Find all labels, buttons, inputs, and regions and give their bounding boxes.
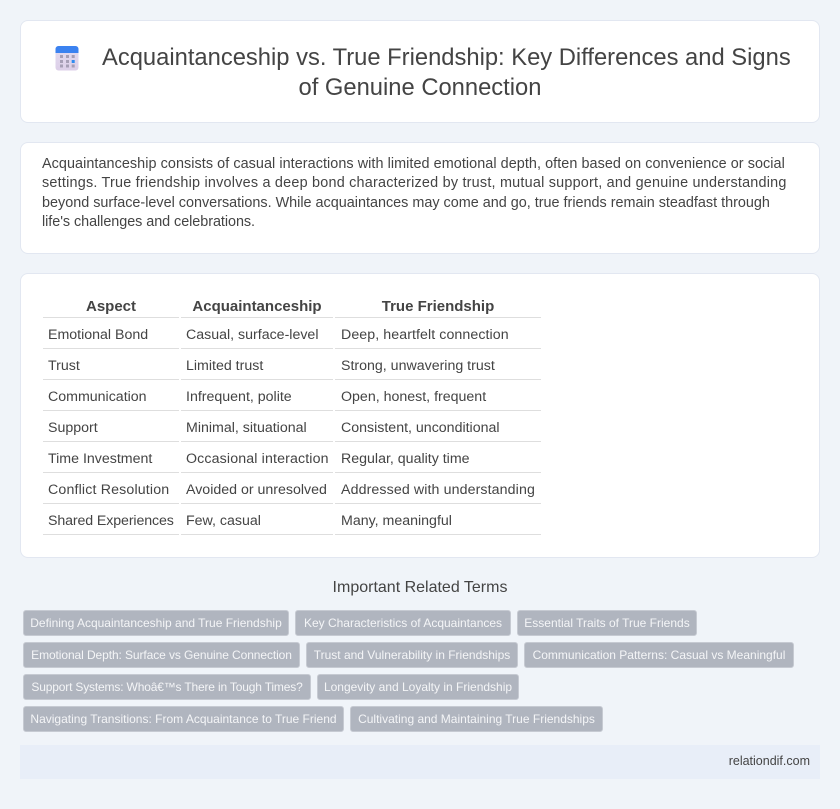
row: emotional bond: Casual, surface-level xyxy=(186,327,318,343)
chip xyxy=(524,642,794,668)
row: conflict resolution: Avoided or unresolved xyxy=(186,482,327,498)
chip: Essential Traits of True Friends xyxy=(524,616,690,630)
footer bar xyxy=(20,745,820,779)
chip: Emotional Depth: Surface vs Genuine Connection xyxy=(31,648,292,662)
row: communication: Communication xyxy=(48,389,147,405)
chip xyxy=(350,706,603,732)
chip xyxy=(517,610,697,636)
row: communication: Infrequent, polite xyxy=(186,389,292,405)
panel: intro paragraph xyxy=(20,142,820,254)
row: support: Consistent, unconditional xyxy=(341,420,500,436)
row: shared experiences: Many, meaningful xyxy=(341,513,452,529)
row: shared experiences: Few, casual xyxy=(186,513,261,529)
chip: Trust and Vulnerability in Friendships xyxy=(314,648,510,662)
chip xyxy=(295,610,511,636)
row: time investment: Regular, quality time xyxy=(341,451,470,467)
table header: true friendship: True Friendship xyxy=(382,298,494,315)
row: conflict resolution: Addressed with understanding xyxy=(341,482,535,498)
row: communication: Open, honest, frequent xyxy=(341,389,486,405)
chip: Defining Acquaintanceship and True Friendship xyxy=(30,616,282,630)
row: communication xyxy=(48,389,486,405)
row: emotional bond xyxy=(48,327,509,343)
title: of Genuine Connection xyxy=(299,74,541,101)
intro text: settings. True friendship involves a deep bond characterized by trust, mutual support, and genuine understanding xyxy=(42,175,787,191)
chip xyxy=(23,610,289,636)
row: support: Minimal, situational xyxy=(186,420,307,436)
table header: acquaintanceship: Acquaintanceship xyxy=(192,298,322,315)
intro text xyxy=(42,156,787,230)
row: time investment: Time Investment xyxy=(48,451,152,467)
chip xyxy=(23,706,344,732)
heading: important related terms: Important Related Terms xyxy=(333,579,507,596)
row: shared experiences xyxy=(48,513,452,529)
chip: Support Systems: Whoâ€™s There in Tough Times? xyxy=(31,680,303,694)
row: trust xyxy=(48,358,495,374)
chip: Communication Patterns: Casual vs Meaningful xyxy=(533,648,785,662)
chip: Key Characteristics of Acquaintances xyxy=(304,616,502,630)
chip: Navigating Transitions: From Acquaintance to True Friend xyxy=(30,712,337,726)
row: support xyxy=(48,420,500,436)
row: time investment xyxy=(48,451,470,467)
chip xyxy=(317,674,519,700)
chip: Longevity and Loyalty in Friendship xyxy=(324,680,512,694)
icon: calendar xyxy=(56,46,78,70)
chip xyxy=(23,674,311,700)
chip xyxy=(306,642,518,668)
row: emotional bond: Deep, heartfelt connection xyxy=(341,327,509,343)
table header: aspect: Aspect xyxy=(86,298,136,315)
intro text: life's challenges and celebrations. xyxy=(42,214,255,230)
chip xyxy=(23,642,300,668)
row: trust: Trust xyxy=(48,358,80,374)
row: support: Support xyxy=(48,420,98,436)
row: conflict resolution: Conflict Resolution xyxy=(48,482,169,498)
row: shared experiences: Shared Experiences xyxy=(48,513,174,529)
footer source: relationdif.com xyxy=(729,754,810,768)
row: trust: Limited trust xyxy=(186,358,263,374)
chip: Cultivating and Maintaining True Friendships xyxy=(358,712,595,726)
row: time investment: Occasional interaction xyxy=(186,451,329,467)
title xyxy=(102,44,791,101)
intro text: Acquaintanceship consists of casual interactions with limited emotional depth, often based on convenience or social xyxy=(42,156,785,172)
intro text: beyond surface-level conversations. While acquaintances may come and go, true friends remain steadfast through xyxy=(42,195,770,211)
related terms chips xyxy=(23,610,794,732)
row: emotional bond: Emotional Bond xyxy=(48,327,148,343)
header card xyxy=(20,20,820,123)
title: Acquaintanceship vs. True Friendship: Key Differences and Signs xyxy=(102,44,791,71)
panel: comparison table xyxy=(20,273,820,558)
row: conflict resolution xyxy=(48,482,535,498)
row: trust: Strong, unwavering trust xyxy=(341,358,495,374)
